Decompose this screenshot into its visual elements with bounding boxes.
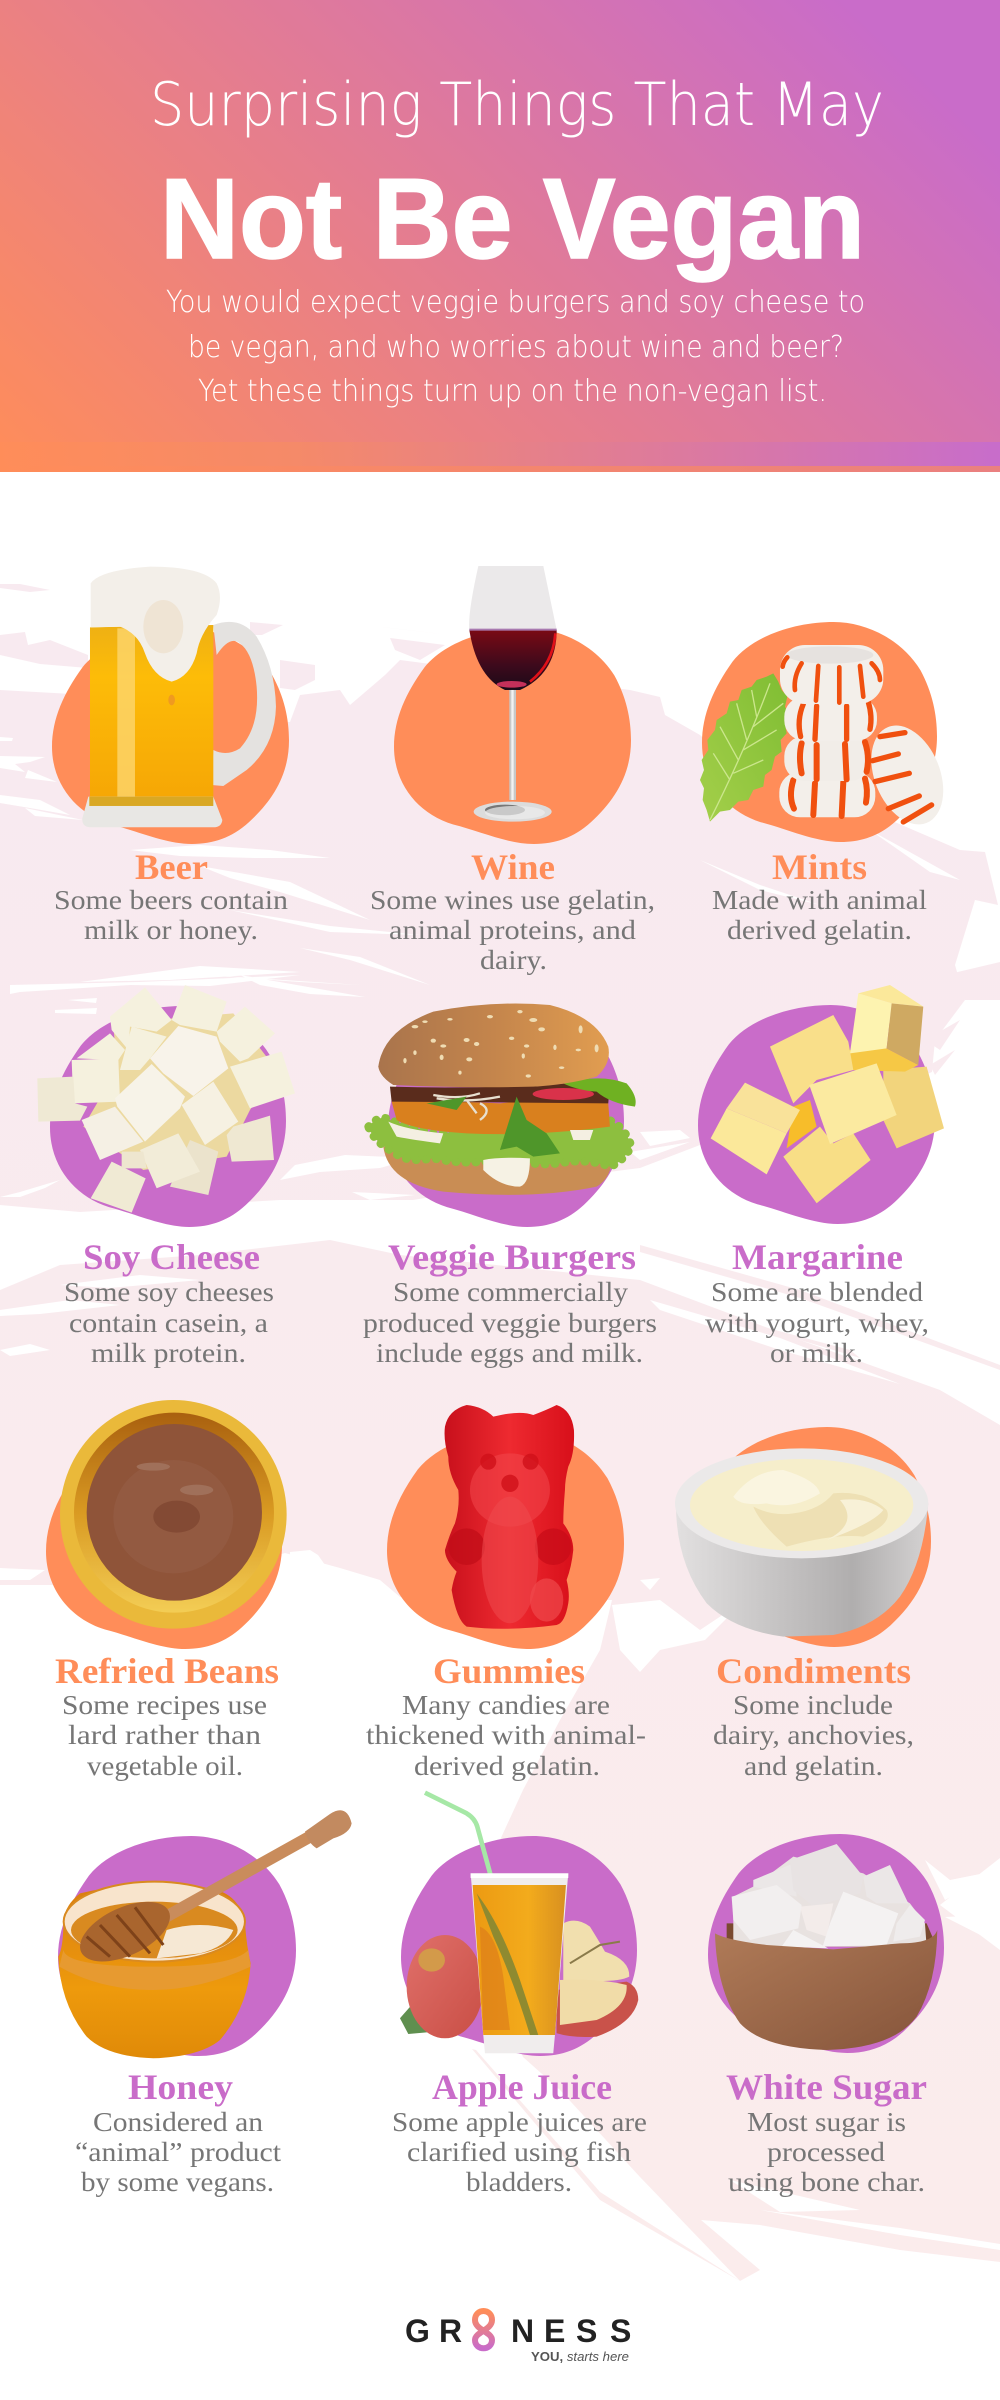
description: thickened with animal- bbox=[366, 1720, 646, 1750]
title line two: Not Be Vegan bbox=[160, 156, 865, 283]
icon: wooden bowl of sugar cubes bbox=[715, 1844, 937, 2050]
purple blob bbox=[401, 1836, 637, 2056]
description: milk protein. bbox=[91, 1338, 246, 1368]
heading: Condiments bbox=[716, 1651, 911, 1691]
description: dairy. bbox=[480, 945, 547, 975]
description: Many candies are bbox=[402, 1690, 610, 1720]
description: derived gelatin. bbox=[414, 1751, 600, 1781]
description bbox=[705, 1277, 929, 1368]
card: mints bbox=[700, 622, 957, 945]
icon: peppermint candies and leaf bbox=[700, 645, 957, 835]
description: vegetable oil. bbox=[87, 1751, 243, 1781]
description: Considered an bbox=[93, 2107, 264, 2137]
heading: Veggie Burgers bbox=[388, 1237, 636, 1277]
description bbox=[62, 1690, 267, 1781]
description bbox=[366, 1690, 646, 1781]
description: Some commercially bbox=[393, 1277, 629, 1307]
icon: butter pieces bbox=[711, 985, 944, 1203]
description: using bone char. bbox=[728, 2167, 925, 2197]
heading: Apple Juice bbox=[432, 2067, 612, 2107]
card: apple juice bbox=[392, 1793, 647, 2197]
description: derived gelatin. bbox=[727, 915, 912, 945]
description bbox=[728, 2107, 925, 2197]
logo: GR8NESS: YOU, starts here bbox=[531, 2349, 629, 2364]
description bbox=[713, 1690, 914, 1781]
card: margarine bbox=[698, 985, 944, 1368]
description: Some beers contain bbox=[54, 885, 289, 915]
purple blob bbox=[50, 1006, 286, 1227]
intro paragraph: Yet these things turn up on the non-vegan list. bbox=[198, 374, 827, 409]
icon: wine glass bbox=[469, 566, 557, 822]
description bbox=[75, 2107, 282, 2197]
logo: GR8NESS: NESS bbox=[511, 2313, 631, 2349]
card: wine bbox=[370, 566, 655, 975]
description: milk or honey. bbox=[84, 915, 258, 945]
orange blob bbox=[702, 622, 937, 842]
purple blob bbox=[388, 1006, 624, 1227]
description: dairy, anchovies, bbox=[713, 1720, 914, 1750]
card: gummies bbox=[366, 1405, 646, 1781]
description: “animal” product bbox=[75, 2137, 282, 2167]
icon: beer mug bbox=[82, 567, 276, 827]
icon: bowl of refried beans bbox=[60, 1400, 287, 1629]
logo figure eight bbox=[475, 2311, 492, 2348]
description: by some vegans. bbox=[81, 2167, 274, 2197]
description bbox=[370, 885, 655, 975]
orange blob bbox=[695, 1427, 931, 1647]
purple blob bbox=[58, 1836, 296, 2056]
heading: Soy Cheese bbox=[83, 1237, 260, 1277]
page header band bbox=[0, 0, 1000, 472]
description: Some include bbox=[733, 1690, 893, 1720]
purple blob bbox=[708, 1834, 944, 2053]
card: beer bbox=[52, 567, 289, 945]
description: with yogurt, whey, bbox=[705, 1308, 929, 1338]
description bbox=[64, 1277, 274, 1368]
description: contain casein, a bbox=[69, 1308, 268, 1338]
description: Some recipes use bbox=[62, 1690, 267, 1720]
intro paragraph: You would expect veggie burgers and soy cheese to bbox=[166, 285, 865, 320]
description: Some are blended bbox=[711, 1277, 924, 1307]
card: refried beans bbox=[46, 1400, 287, 1781]
heading: Margarine bbox=[732, 1237, 903, 1277]
description: clarified using fish bbox=[407, 2137, 632, 2167]
description: Some soy cheeses bbox=[64, 1277, 274, 1307]
icon: veggie burger bbox=[368, 1003, 636, 1195]
description: Some wines use gelatin, bbox=[370, 885, 655, 915]
background brush texture bbox=[0, 584, 1000, 2281]
heading: Honey bbox=[128, 2067, 233, 2107]
description: produced veggie burgers bbox=[363, 1308, 657, 1338]
heading: Wine bbox=[471, 847, 555, 887]
orange blob bbox=[394, 628, 631, 844]
card: honey bbox=[58, 1810, 352, 2197]
icon: honey jar with dipper bbox=[58, 1810, 352, 2058]
title line one: Surprising Things That May bbox=[150, 70, 884, 140]
description: include eggs and milk. bbox=[376, 1338, 643, 1368]
intro paragraph bbox=[166, 285, 865, 409]
description bbox=[54, 885, 289, 945]
logo: GR8NESS: GR bbox=[405, 2313, 462, 2349]
description bbox=[392, 2107, 647, 2197]
card: white sugar bbox=[708, 1834, 944, 2197]
card: condiments bbox=[675, 1427, 931, 1781]
orange blob bbox=[46, 1432, 282, 1649]
icon: bowl of cream bbox=[675, 1448, 928, 1637]
description: Made with animal bbox=[712, 885, 927, 915]
purple blob bbox=[698, 1005, 935, 1224]
icon: apple juice glass with apples bbox=[400, 1793, 638, 2053]
icon: red gummy bear bbox=[445, 1405, 574, 1629]
description: lard rather than bbox=[68, 1720, 262, 1750]
card: veggie burgers bbox=[363, 1003, 657, 1368]
orange blob bbox=[52, 628, 289, 844]
intro paragraph: be vegan, and who worries about wine and beer? bbox=[188, 330, 844, 365]
heading: White Sugar bbox=[726, 2067, 927, 2107]
description: Some apple juices are bbox=[392, 2107, 647, 2137]
icon: tofu cubes bbox=[37, 985, 295, 1213]
heading: Gummies bbox=[433, 1651, 585, 1691]
heading: Mints bbox=[772, 847, 867, 887]
orange blob bbox=[387, 1430, 624, 1649]
description: processed bbox=[767, 2137, 886, 2167]
description bbox=[712, 885, 927, 945]
description bbox=[363, 1277, 657, 1368]
heading: Beer bbox=[135, 847, 208, 887]
description: or milk. bbox=[770, 1338, 863, 1368]
heading: Refried Beans bbox=[55, 1651, 279, 1691]
description: animal proteins, and bbox=[389, 915, 637, 945]
logo: GR8NESS bbox=[405, 2311, 631, 2364]
description: bladders. bbox=[466, 2167, 572, 2197]
description: and gelatin. bbox=[744, 1751, 883, 1781]
card: soy cheese bbox=[37, 985, 295, 1368]
description: Most sugar is bbox=[747, 2107, 906, 2137]
